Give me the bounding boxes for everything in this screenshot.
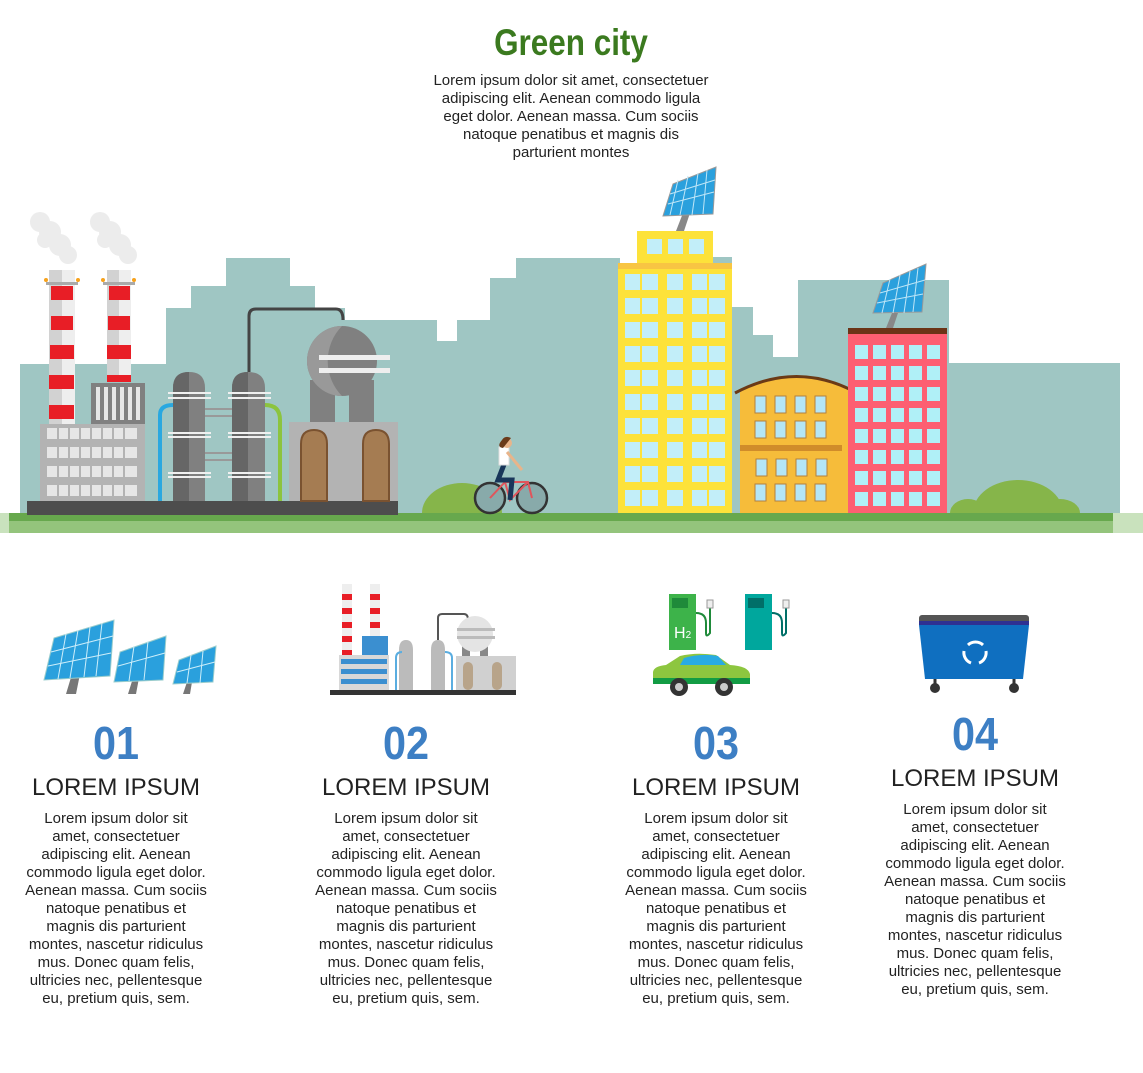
body text: adipiscing elit. Aenean [41,846,191,863]
body text: mus. Donec quam felis, [638,954,794,971]
body text: eu, pretium quis, sem. [42,990,190,1007]
solar panel on pink building [873,264,926,328]
body text: amet, consectetuer [652,828,780,845]
body text: ultricies nec, pellentesque [30,972,202,989]
body text: Aenean massa. Cum sociis [315,882,497,899]
body text: commodo ligula eget dolor. [626,864,806,881]
body text: mus. Donec quam felis, [328,954,484,971]
intro text: parturient montes [513,144,629,161]
number 02: 02 [383,717,429,769]
city illustration [0,166,1143,533]
body text: eu, pretium quis, sem. [332,990,480,1007]
factory [27,212,398,515]
body text: Aenean massa. Cum sociis [884,873,1066,890]
intro text [433,72,709,161]
body text: eu, pretium quis, sem. [901,981,1049,998]
body text: Aenean massa. Cum sociis [25,882,207,899]
pink building [848,328,947,513]
body text [315,810,497,1007]
intro text: adipiscing elit. Aenean commodo ligula [442,90,700,107]
body text: magnis dis parturient [336,918,476,935]
intro text: Lorem ipsum dolor sit amet, consectetuer [433,72,709,89]
title: Green city [494,22,648,63]
body text: magnis dis parturient [646,918,786,935]
chimneys [49,270,75,425]
body text: eu, pretium quis, sem. [642,990,790,1007]
body text [25,810,207,1007]
intro text: eget dolor. Aenean massa. Cum sociis [443,108,699,125]
body text: montes, nascetur ridiculus [629,936,803,953]
number 03: 03 [693,717,739,769]
body text: amet, consectetuer [52,828,180,845]
number 01: 01 [93,717,139,769]
heading: LOREM IPSUM [322,774,490,801]
column 4 [884,615,1066,998]
body text: Lorem ipsum dolor sit [44,810,188,827]
icon: hydrogen pumps and car [653,594,790,696]
body text [625,810,807,1007]
body text: Aenean massa. Cum sociis [625,882,807,899]
body text: natoque penatibus et [46,900,186,917]
body text: mus. Donec quam felis, [897,945,1053,962]
icon: hydrogen pumps and car: H2 [674,625,692,642]
cyclist [475,437,547,513]
solar panel on yellow tower [663,167,716,231]
body text [884,801,1066,998]
heading: LOREM IPSUM [891,765,1059,792]
tanks [173,372,205,501]
column 2 [315,584,516,1007]
body text: ultricies nec, pellentesque [320,972,492,989]
body text: commodo ligula eget dolor. [885,855,1065,872]
column 3 [625,594,807,1007]
body text: adipiscing elit. Aenean [331,846,481,863]
column 1 [25,620,216,1007]
body text: amet, consectetuer [342,828,470,845]
body text: commodo ligula eget dolor. [316,864,496,881]
body text: montes, nascetur ridiculus [888,927,1062,944]
body text: montes, nascetur ridiculus [29,936,203,953]
body text: natoque penatibus et [336,900,476,917]
body text: montes, nascetur ridiculus [319,936,493,953]
body text: ultricies nec, pellentesque [630,972,802,989]
pipes [160,405,173,501]
body text: ultricies nec, pellentesque [889,963,1061,980]
intro text: natoque penatibus et magnis dis [463,126,679,143]
number 04: 04 [952,708,998,760]
heading: LOREM IPSUM [632,774,800,801]
body text: mus. Donec quam felis, [38,954,194,971]
body text: natoque penatibus et [905,891,1045,908]
sphere [310,380,335,425]
body text: natoque penatibus et [646,900,786,917]
skyline background [20,257,1120,515]
body text: adipiscing elit. Aenean [641,846,791,863]
body text: Lorem ipsum dolor sit [644,810,788,827]
smoke [30,212,137,264]
body text: Lorem ipsum dolor sit [334,810,478,827]
body text: amet, consectetuer [911,819,1039,836]
body text: magnis dis parturient [905,909,1045,926]
bushes [422,480,1080,513]
icon: factory [330,584,516,695]
heading: LOREM IPSUM [32,774,200,801]
orange building [735,376,857,513]
yellow tower [618,231,732,513]
ground [0,513,1143,533]
body text: adipiscing elit. Aenean [900,837,1050,854]
body text: magnis dis parturient [46,918,186,935]
vent [91,383,145,424]
icon: solar panels [43,620,216,694]
body text: commodo ligula eget dolor. [26,864,206,881]
body text: Lorem ipsum dolor sit [903,801,1047,818]
icon: recycling bin [919,615,1029,693]
